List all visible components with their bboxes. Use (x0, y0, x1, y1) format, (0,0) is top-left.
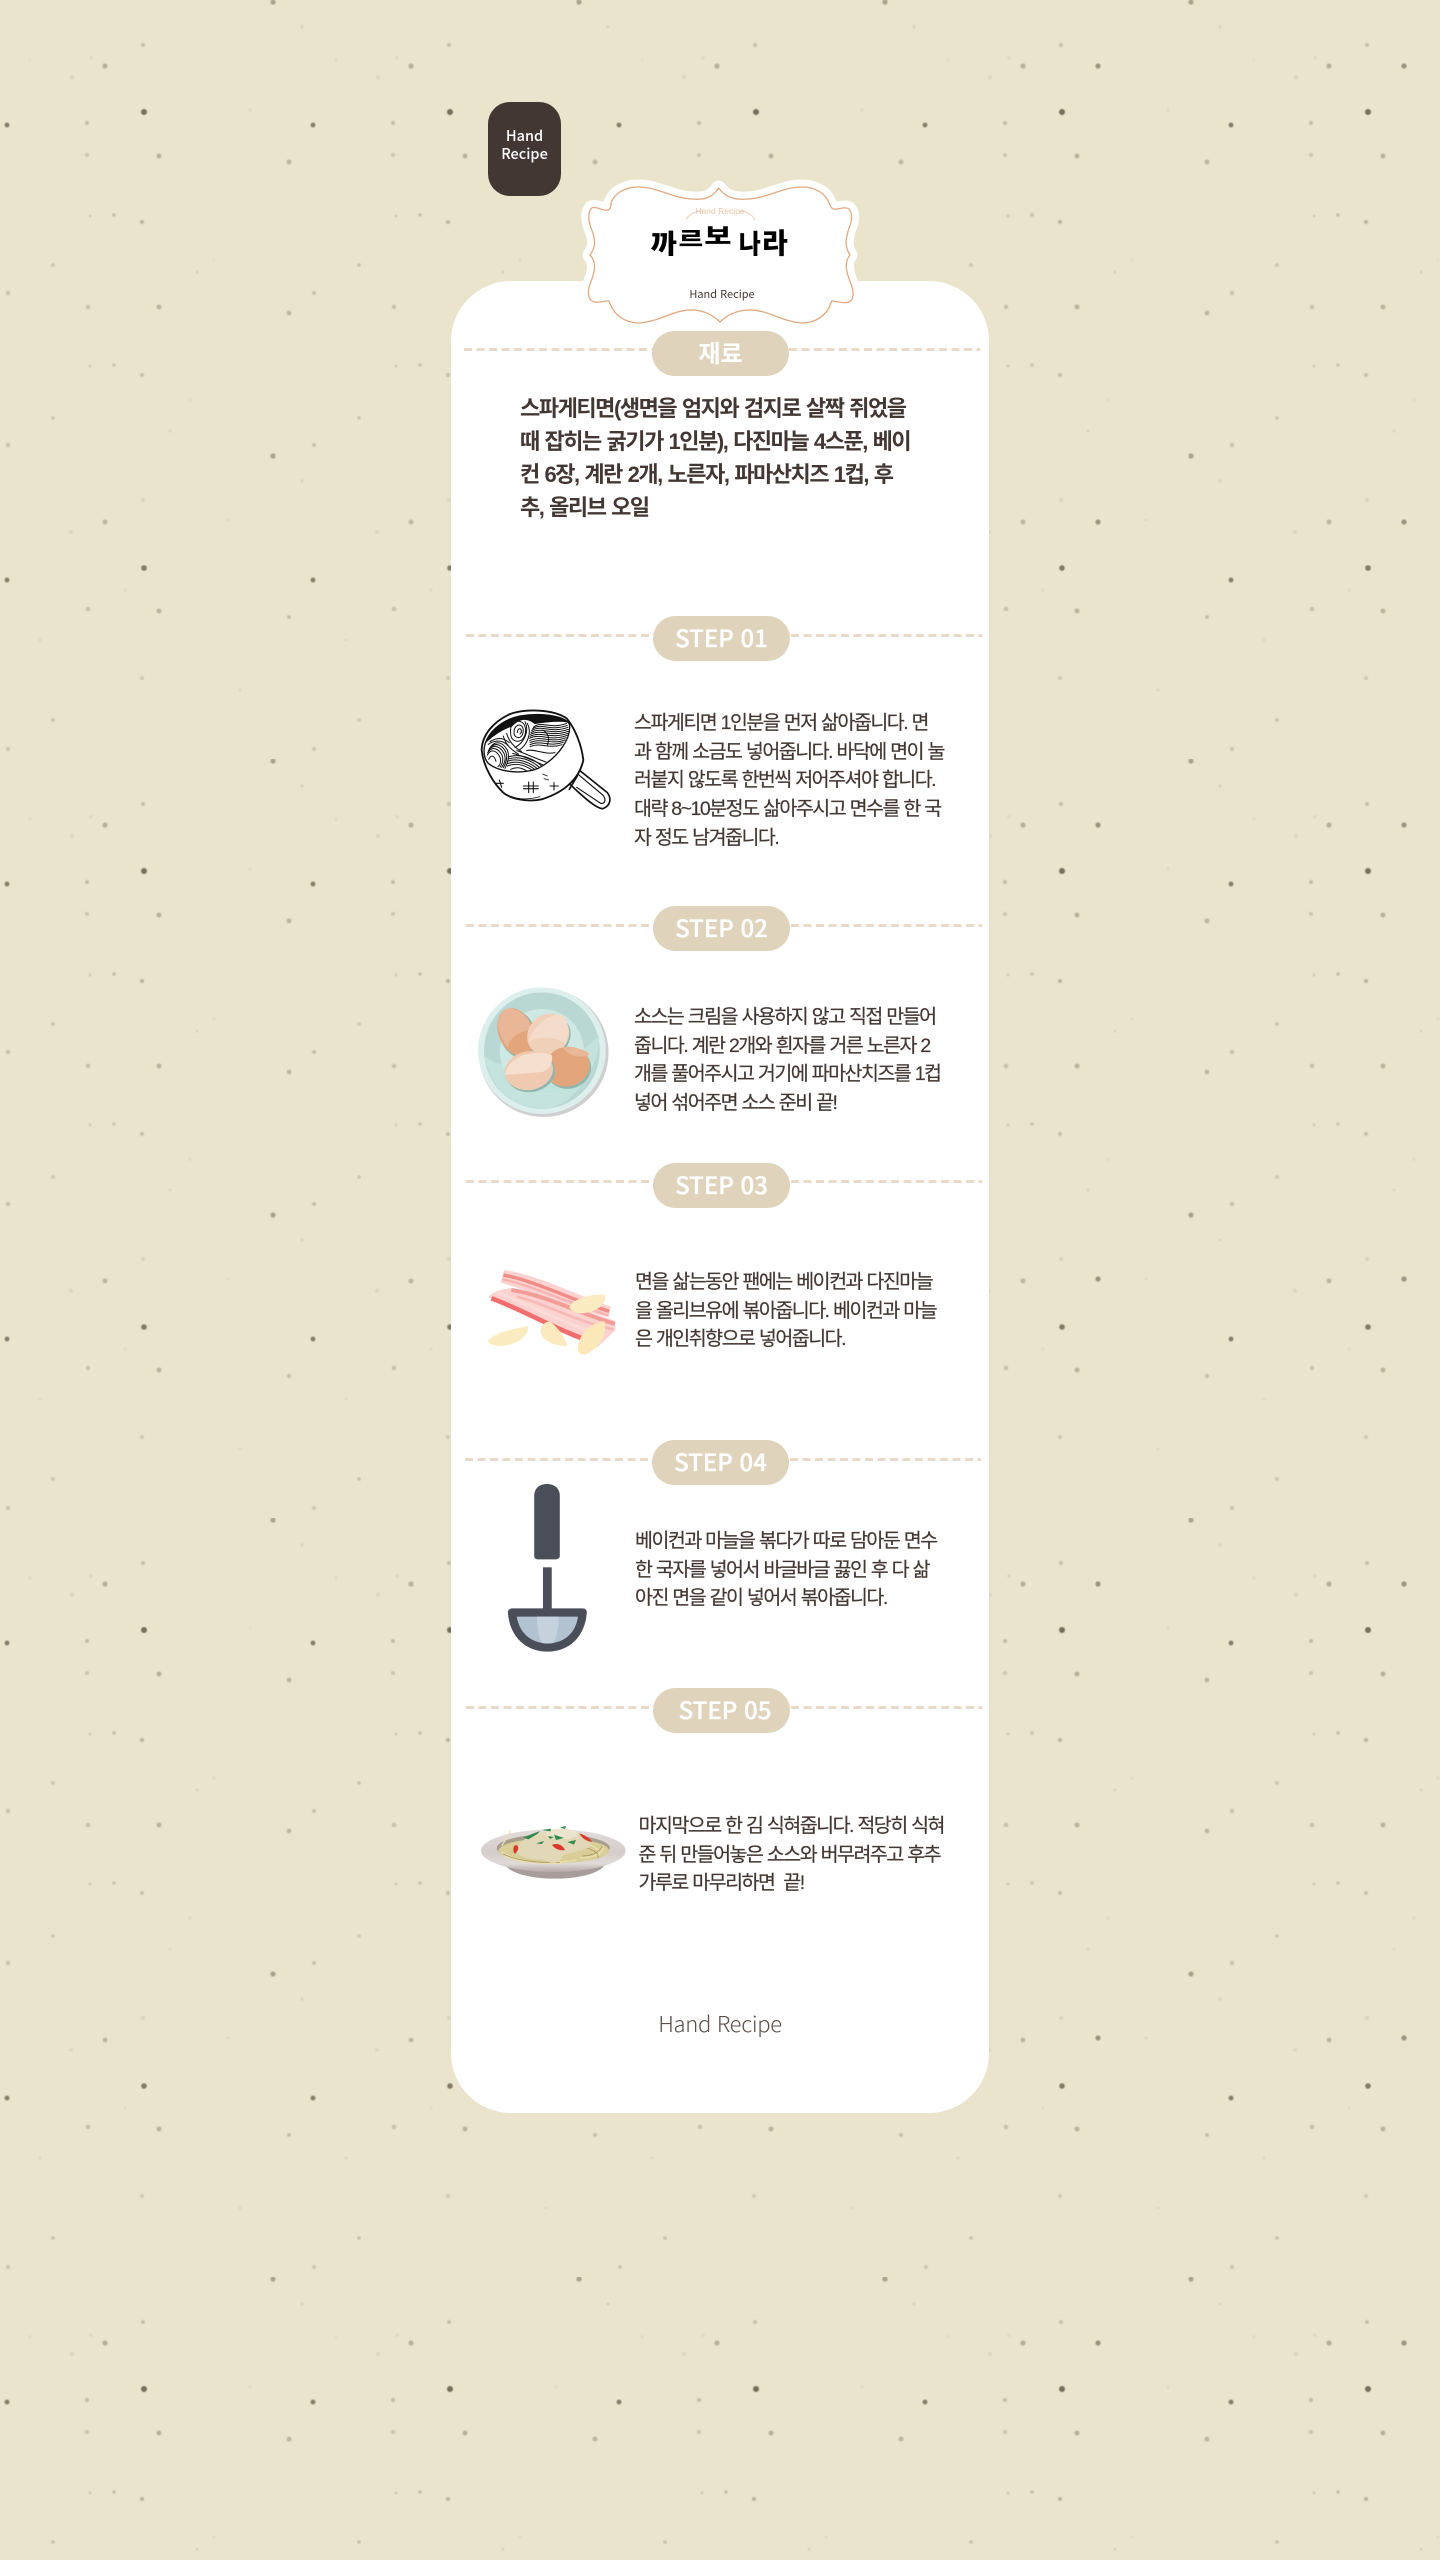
text block: ingredients: 컨 6장, 계란 2개, 노른자, 파마산치즈 1컵, 후 (520, 462, 892, 487)
heading pill: step 01 (653, 616, 790, 661)
divider: step 04 (465, 1458, 981, 1461)
text block: ingredients (520, 396, 910, 520)
text block: step 03: 면을 삶는동안 팬에는 베이컨과 다진마늘 (635, 1271, 932, 1293)
text block: step 02: 넣어 섞어주면 소스 준비 끝! (634, 1092, 836, 1114)
heading pill: 재료 (652, 331, 789, 376)
text block: step 01 (634, 712, 945, 849)
text block: ingredients: 때 잡히는 굵기가 1인분), 다진마늘 4스푼, 베이 (520, 429, 910, 454)
title: carbonara: 보 (704, 219, 731, 251)
icon: noodle pot (480, 710, 611, 810)
divider: step 01 (466, 634, 982, 637)
heading pill: step 05: STEP 05 (679, 1691, 771, 1726)
icon: bacon and garlic (488, 1270, 616, 1355)
text block: step 02 (634, 1006, 940, 1114)
text block: step 05: 마지막으로 한 김 식혀줍니다. 적당히 식혀 (638, 1815, 944, 1837)
heading pill: step 02: STEP 02 (675, 909, 768, 944)
panel: recipe card (451, 281, 989, 2113)
icon: plated pasta (481, 1826, 626, 1879)
badge: Hand Recipe: Hand (506, 125, 543, 146)
text block: ingredients: 추, 올리브 오일 (520, 495, 649, 520)
heading pill: step 03 (653, 1163, 790, 1208)
text block: step 04 (635, 1530, 938, 1609)
title: carbonara: 나 (739, 224, 761, 262)
badge: Hand Recipe: Recipe (501, 142, 548, 164)
text block: step 01: 스파게티면 1인분을 먼저 삶아줍니다. 면 (634, 712, 928, 734)
text block: step 02: 소스는 크림을 사용하지 않고 직접 만들어 (634, 1006, 936, 1028)
heading pill: step 02 (653, 906, 790, 951)
heading pill: step 03: STEP 03 (675, 1166, 768, 1201)
text block: step 04: 아진 면을 같이 넣어서 볶아줍니다. (635, 1587, 887, 1609)
text block: step 03 (635, 1271, 937, 1350)
text block: step 05 (638, 1815, 944, 1894)
footer text: Hand Recipe (658, 2007, 782, 2039)
icon: eggs on plate (478, 988, 608, 1117)
label caption: Hand Recipe (689, 286, 755, 302)
divider: step 03 (466, 1180, 982, 1183)
text block: step 02: 개를 풀어주시고 거기에 파마산치즈를 1컵 (634, 1063, 940, 1085)
title label frame (581, 180, 860, 324)
heading pill: step 04 (652, 1440, 789, 1485)
title: carbonara: 르 (679, 224, 703, 252)
text block: step 04: 베이컨과 마늘을 볶다가 따로 담아둔 면수 (635, 1530, 937, 1552)
text block: step 01: 과 함께 소금도 넣어줍니다. 바닥에 면이 눌 (634, 741, 944, 763)
icon: ladle (508, 1484, 587, 1652)
title: carbonara: 라 (762, 222, 788, 262)
badge: Hand Recipe (488, 102, 561, 196)
small arched label: Hand Recipe (695, 206, 745, 216)
text block: step 01: 러붙지 않도록 한번씩 저어주셔야 합니다. (634, 769, 935, 791)
text block: ingredients: 스파게티면(생면을 엄지와 검지로 살짝 쥐었을 (520, 396, 906, 421)
title: carbonara: 까 (651, 224, 677, 262)
divider: step 02 (466, 924, 982, 927)
section divider: ingredients (464, 348, 980, 351)
title: carbonara (651, 219, 788, 262)
heading pill: step 01: STEP 01 (675, 619, 768, 654)
text block: step 01: 자 정도 남겨줍니다. (634, 827, 778, 849)
text block: step 03: 은 개인취향으로 넣어줍니다. (635, 1328, 845, 1350)
text block: step 02: 줍니다. 계란 2개와 흰자를 거른 노른자 2 (634, 1035, 930, 1057)
text block: step 04: 한 국자를 넣어서 바글바글 끓인 후 다 삶 (635, 1559, 929, 1581)
text block: step 01: 대략 8~10분정도 삶아주시고 면수를 한 국 (634, 798, 941, 820)
heading pill: 재료: 재료 (698, 334, 743, 369)
divider: step 05 (466, 1706, 982, 1709)
heading pill: step 05 (653, 1688, 790, 1733)
text block: step 03: 을 올리브유에 볶아줍니다. 베이컨과 마늘 (635, 1300, 936, 1322)
heading pill: step 04: STEP 04 (674, 1443, 767, 1478)
text block: step 05: 준 뒤 만들어놓은 소스와 버무려주고 후추 (638, 1844, 940, 1866)
text block: step 05: 가루로 마무리하면 끝! (638, 1872, 804, 1894)
